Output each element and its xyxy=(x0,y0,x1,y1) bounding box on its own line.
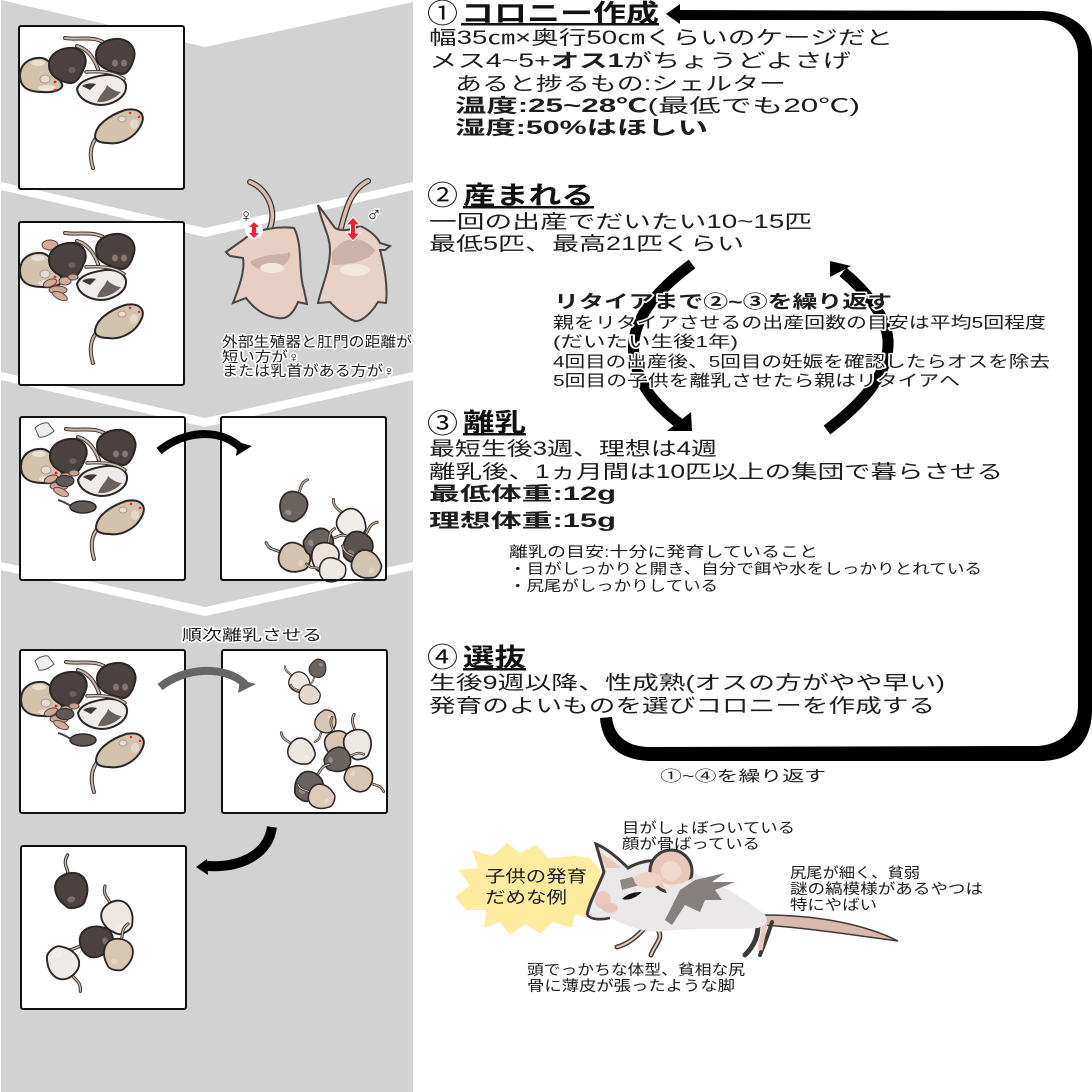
annotation: body and legs: 頭でっかちな体型、貧相な尻 xyxy=(527,962,746,979)
annotation: eyes and face: 目がしょぼついている xyxy=(622,820,795,837)
text block: step 4: 発育のよいものを選びコロニーを作成する xyxy=(429,695,935,717)
text block: weaning criteria: ・目がしっかりと開き、自分で餌や水をしっかりとれている xyxy=(509,561,982,578)
panel: cage with remaining pups xyxy=(20,650,185,813)
annotation: body and legs: 骨に薄皮が張ったような脚 xyxy=(527,978,735,995)
heading: step 1: コロニー作成 xyxy=(461,0,659,28)
annotation: tail and stripes: 謎の縞模様があるやつは xyxy=(790,881,983,898)
text block: step 1: あると捗るもの:シェルター xyxy=(455,73,786,95)
arrow: to selected cage xyxy=(196,827,272,875)
text block: step 3: 離乳後、1ヵ月間は10匹以上の集団で暮らさせる xyxy=(429,461,1003,483)
symbol: male: ♂ xyxy=(366,202,382,227)
text block: retire note xyxy=(553,292,1050,390)
annotation: tail and stripes xyxy=(790,865,983,914)
text block: weaning criteria xyxy=(509,544,982,595)
panel: cage with newborn pups xyxy=(19,222,184,385)
heading: step 4: 選抜 xyxy=(463,644,526,672)
text block: step 2: 一回の出産でだいたい10~15匹 xyxy=(429,211,812,233)
arrow: female distance xyxy=(245,221,263,239)
text block: retire note: 親をリタイアさせるの出産回数の目安は平均5回程度 xyxy=(553,314,1046,332)
label: repeat: ①~④を繰り返す xyxy=(660,768,826,785)
text block: retire note: リタイアまで②~③を繰り返す xyxy=(554,292,892,312)
heading: step 2 xyxy=(427,181,594,211)
text block: step 1: 温度:25~28℃ (最低でも20℃) xyxy=(455,95,860,117)
annotation: eyes and face xyxy=(622,820,795,853)
heading: step 4 xyxy=(427,643,526,673)
heading: step 3 xyxy=(427,409,526,439)
caption: sexing: 短い方が♀ xyxy=(222,349,300,366)
text block: step 3: 理想体重:15g xyxy=(429,510,616,532)
heading: step 3: ③ xyxy=(427,409,458,439)
illustration: poorly grown mouse xyxy=(587,844,898,955)
text block: weaning criteria: 離乳の目安:十分に発育していること xyxy=(509,544,818,561)
caption: sexing xyxy=(222,334,413,380)
text block: step 1: メス4~5+ オス1 がちょうどよさげ xyxy=(429,50,851,72)
panel: cage with second weaning group xyxy=(222,650,389,813)
text block: step 3 xyxy=(429,438,1003,532)
text block: step 2 xyxy=(429,211,812,255)
symbol: female: ♀ xyxy=(239,206,253,227)
callout: bad example burst: だめな例 xyxy=(485,888,567,907)
callout: bad example burst xyxy=(455,843,600,935)
text block: step 4 xyxy=(429,672,945,717)
arrow: second weaning move xyxy=(160,671,256,693)
annotation: tail and stripes: 特にやばい xyxy=(790,897,877,914)
text block: retire note: (だいたい生後1年) xyxy=(553,333,738,351)
illustration: sexing male and female pups xyxy=(226,181,390,321)
text block: step 1: 湿度:50%はほしい xyxy=(455,117,708,139)
panel: cage with weaned pups xyxy=(221,417,386,584)
text block: weaning criteria: ・尻尾がしっかりしている xyxy=(509,578,718,595)
arrow: first weaning move xyxy=(159,434,252,456)
text block: step 4: 生後9週以降、性成熟(オスの方がやや早い) xyxy=(429,672,945,694)
text block: retire note: 4回目の出産後、5回目の妊娠を確認したらオスを除去 xyxy=(553,353,1050,371)
text block: step 1: 幅35 ㎝ ×奥行50 ㎝ くらいのケージだと xyxy=(429,23,893,50)
heading: step 4: ④ xyxy=(427,643,458,673)
panel: cage with colony xyxy=(19,26,184,189)
annotation: eyes and face: 顔が骨ばっている xyxy=(622,836,760,853)
caption: sexing: または乳首がある方が♀ xyxy=(222,363,395,380)
annotation: tail and stripes: 尻尾が細く、貧弱 xyxy=(790,865,920,882)
text block: step 3: 最低体重:12g xyxy=(429,483,616,505)
text block: step 3: 最短生後3週、理想は4週 xyxy=(429,438,717,460)
caption: sexing: 外部生殖器と肛門の距離が xyxy=(222,334,413,351)
heading: step 2: ② xyxy=(427,181,458,211)
text block: step 1 xyxy=(429,23,893,139)
text block: step 2: 最低5匹、最高21匹くらい xyxy=(429,233,744,255)
heading: step 1 xyxy=(427,0,659,29)
heading: step 2: 産まれる xyxy=(463,182,594,210)
callout: bad example burst: 子供の発育 xyxy=(485,867,587,886)
chevron background xyxy=(1,0,413,1092)
label: sequential weaning: 順次離乳させる xyxy=(182,627,322,644)
arrow: big return loop xyxy=(600,4,1092,761)
annotation: body and legs xyxy=(527,962,746,995)
arrow: retire cycle right xyxy=(827,261,888,430)
panel: cage with selected mice xyxy=(21,846,186,1009)
text block: retire note: 5回目の子供を離乳させたら親はリタイアへ xyxy=(553,372,960,390)
panel: cage before first weaning xyxy=(20,417,185,580)
arrow: retire cycle left xyxy=(633,264,692,431)
arrow: male distance xyxy=(346,217,360,241)
heading: step 3: 離乳 xyxy=(463,409,526,437)
